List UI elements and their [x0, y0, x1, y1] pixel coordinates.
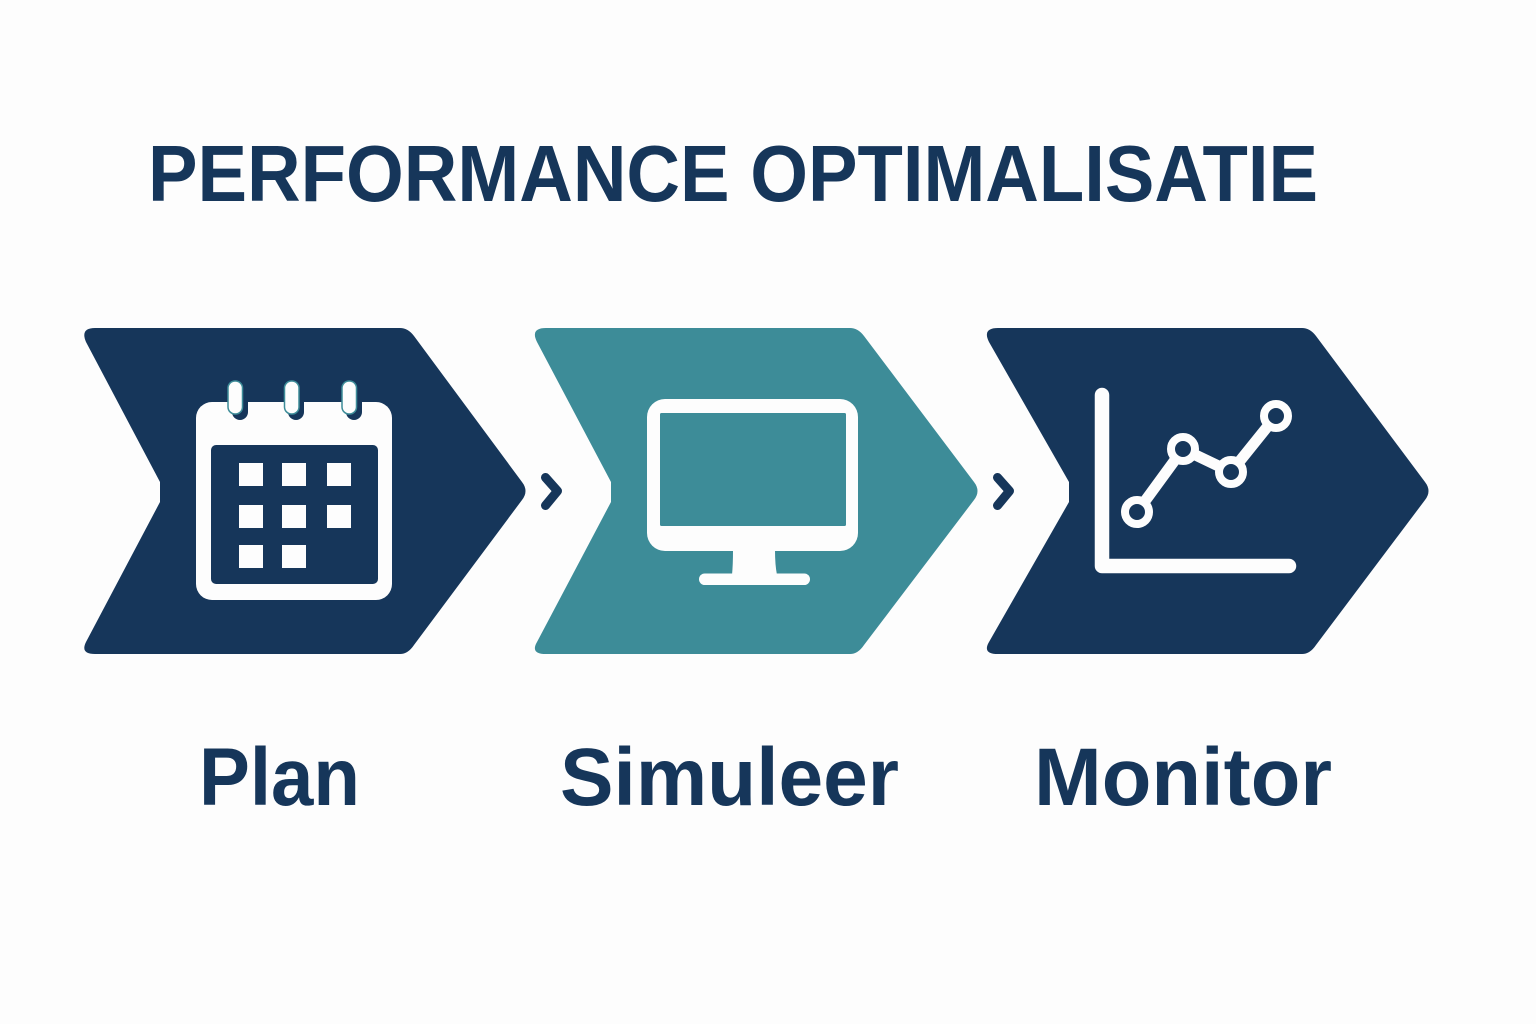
- arrow: plan to simuleer: [546, 478, 558, 506]
- arrow: simuleer to monitor: [998, 478, 1010, 506]
- label: plan: Plan: [199, 732, 360, 823]
- chevron: monitor: [987, 328, 1428, 654]
- title: PERFORMANCE OPTIMALISATIE: [148, 129, 1318, 218]
- icon: calendar: [196, 381, 392, 600]
- chevron: simuleer: [535, 328, 978, 654]
- chevron: plan: [84, 328, 526, 654]
- label: monitor: Monitor: [1034, 732, 1332, 823]
- icon: line chart: [1102, 395, 1289, 566]
- icon: monitor: [647, 399, 858, 585]
- label: simuleer: Simuleer: [560, 732, 899, 823]
